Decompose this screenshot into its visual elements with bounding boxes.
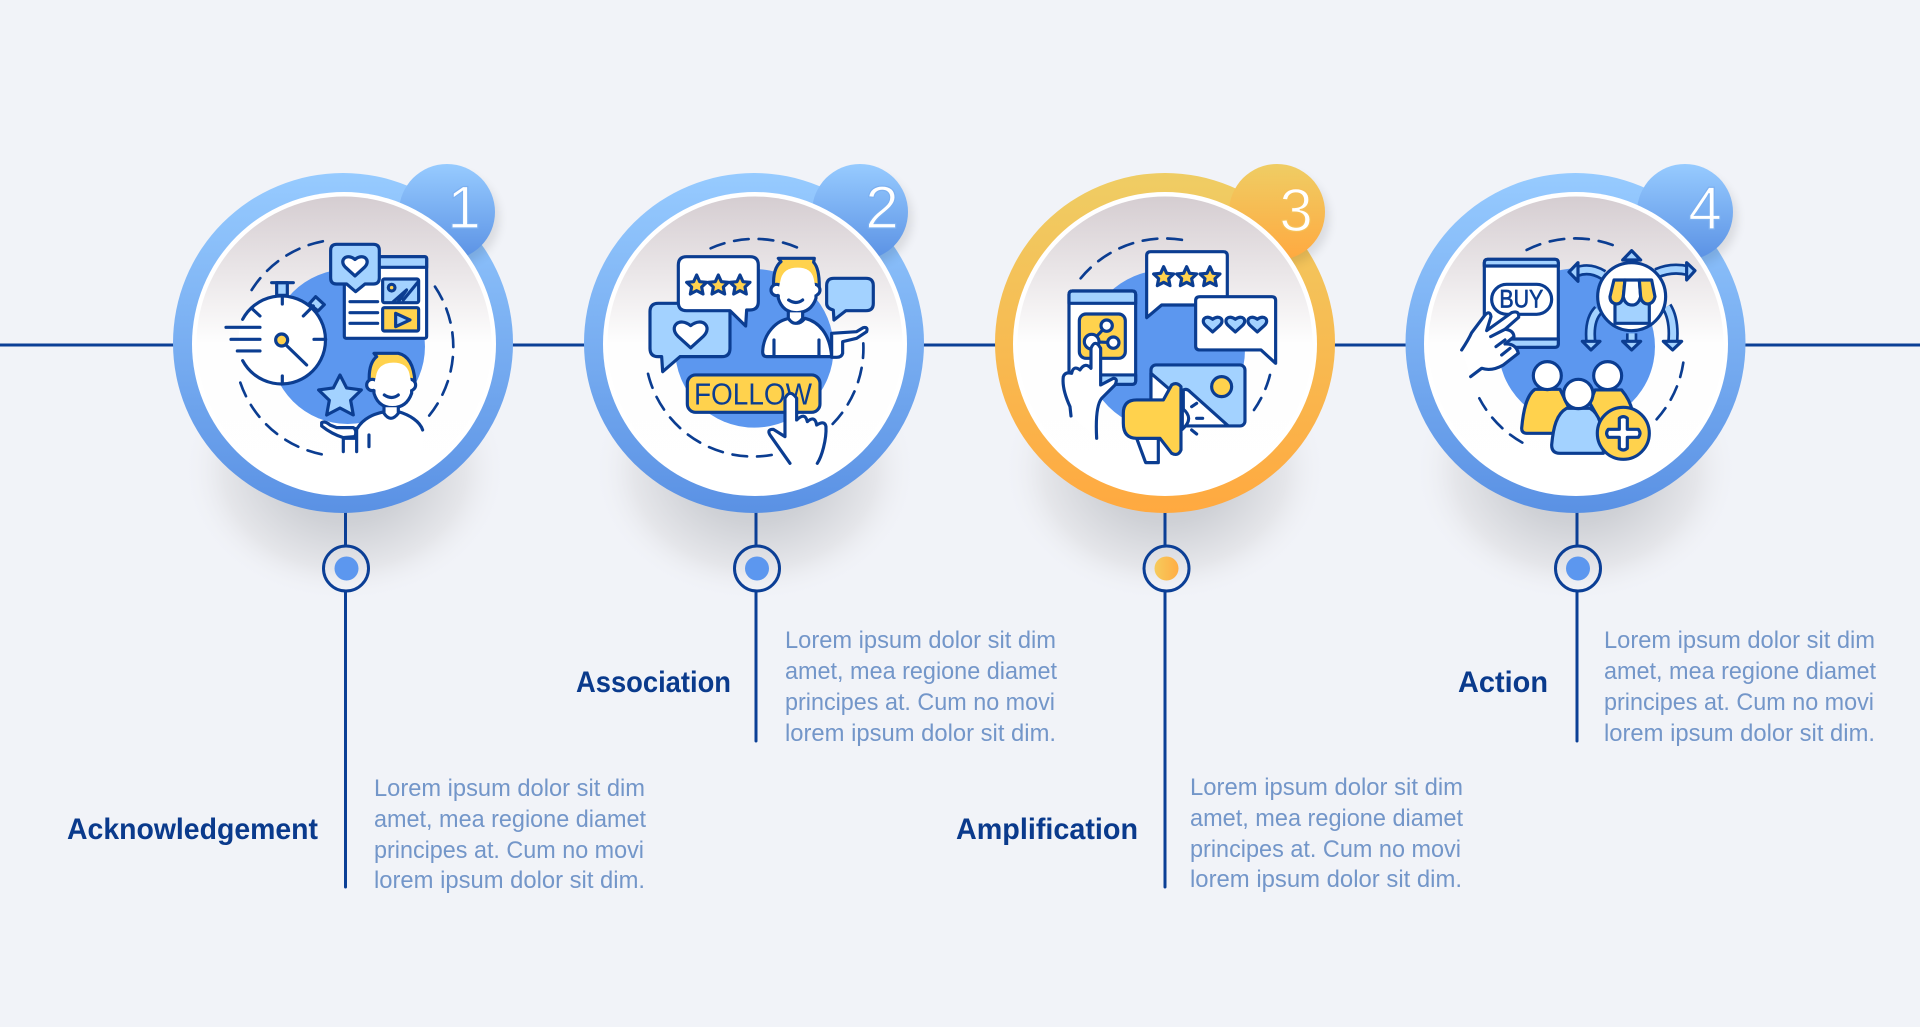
body text 4	[1604, 627, 1876, 747]
node 4	[1556, 546, 1600, 591]
icon: reviews, influencer, follow button	[647, 239, 873, 463]
ring 4	[1406, 173, 1746, 513]
badge 4: 4	[1688, 175, 1722, 242]
shadow 3	[1003, 338, 1327, 602]
body text 1	[374, 775, 646, 894]
connector line 4	[1576, 510, 1578, 741]
badge shadow 3	[1237, 173, 1329, 265]
icon: buy tablet, store, customers	[1462, 238, 1695, 459]
step 3	[995, 164, 1335, 887]
badge shadow 1	[407, 173, 499, 265]
inner disc 4	[1424, 192, 1728, 496]
body text 2: lorem ipsum dolor sit dim.	[785, 720, 1056, 747]
body text 4: principes at. Cum no movi	[1604, 689, 1874, 716]
badge 3: 3	[1279, 177, 1313, 244]
body text 1: lorem ipsum dolor sit dim.	[374, 867, 645, 894]
icon: buy tablet, store, customers: BUY	[1499, 287, 1543, 314]
icon: reviews, influencer, follow button: FOLLOW	[694, 378, 812, 412]
body text 3: lorem ipsum dolor sit dim.	[1190, 866, 1462, 893]
body text 2	[785, 627, 1057, 747]
heading: Action: Action	[1458, 666, 1548, 699]
shadow 1	[183, 338, 507, 602]
heading: Association: Association	[576, 666, 731, 699]
connector line 2	[754, 510, 758, 741]
body text 3: Lorem ipsum dolor sit dim	[1190, 774, 1463, 801]
badge 1: 1	[447, 174, 481, 241]
connector line 1	[344, 510, 347, 887]
inner disc 3	[1013, 192, 1317, 496]
ring 3	[995, 173, 1335, 513]
step 2	[584, 164, 924, 741]
inner disc 2	[603, 192, 907, 496]
badge 2	[812, 164, 908, 260]
badge 3	[1229, 164, 1325, 260]
body text 3: amet, mea regione diamet	[1190, 805, 1463, 832]
head 2	[771, 258, 820, 323]
body text 2: principes at. Cum no movi	[785, 689, 1055, 716]
ring 1	[173, 173, 513, 513]
body text 3	[1190, 774, 1463, 893]
badge 2: 2	[865, 174, 899, 241]
step 1	[173, 164, 513, 887]
body text 2: amet, mea regione diamet	[785, 658, 1057, 685]
step 4	[1406, 164, 1746, 741]
horizontal timeline	[0, 344, 1920, 346]
badge shadow 4	[1645, 173, 1737, 265]
shadow 4	[1414, 338, 1738, 602]
node 3	[1144, 546, 1189, 591]
body text 2: Lorem ipsum dolor sit dim	[785, 627, 1056, 654]
badge 4	[1637, 164, 1733, 260]
icon: share app, reviews, megaphone	[1063, 238, 1276, 463]
node 1	[324, 546, 368, 591]
body text 1: Lorem ipsum dolor sit dim	[374, 775, 645, 802]
heading: Amplification: Amplification	[956, 813, 1138, 846]
node 2	[734, 546, 780, 591]
ring 2	[584, 173, 924, 513]
badge shadow 2	[820, 173, 912, 265]
body text 3: principes at. Cum no movi	[1190, 836, 1461, 863]
connector line 3	[1164, 510, 1166, 887]
icon: stopwatch, web page, person	[226, 241, 453, 454]
badge 1	[399, 164, 495, 260]
body text 4: lorem ipsum dolor sit dim.	[1604, 720, 1875, 747]
body text 4: Lorem ipsum dolor sit dim	[1604, 627, 1875, 654]
shadow 2	[593, 338, 917, 602]
inner disc 1	[192, 192, 496, 496]
head 1	[367, 353, 416, 418]
body text 4: amet, mea regione diamet	[1604, 658, 1876, 685]
body text 1: amet, mea regione diamet	[374, 806, 646, 833]
body text 1: principes at. Cum no movi	[374, 837, 644, 864]
heading: Acknowledgement: Acknowledgement	[67, 813, 318, 846]
